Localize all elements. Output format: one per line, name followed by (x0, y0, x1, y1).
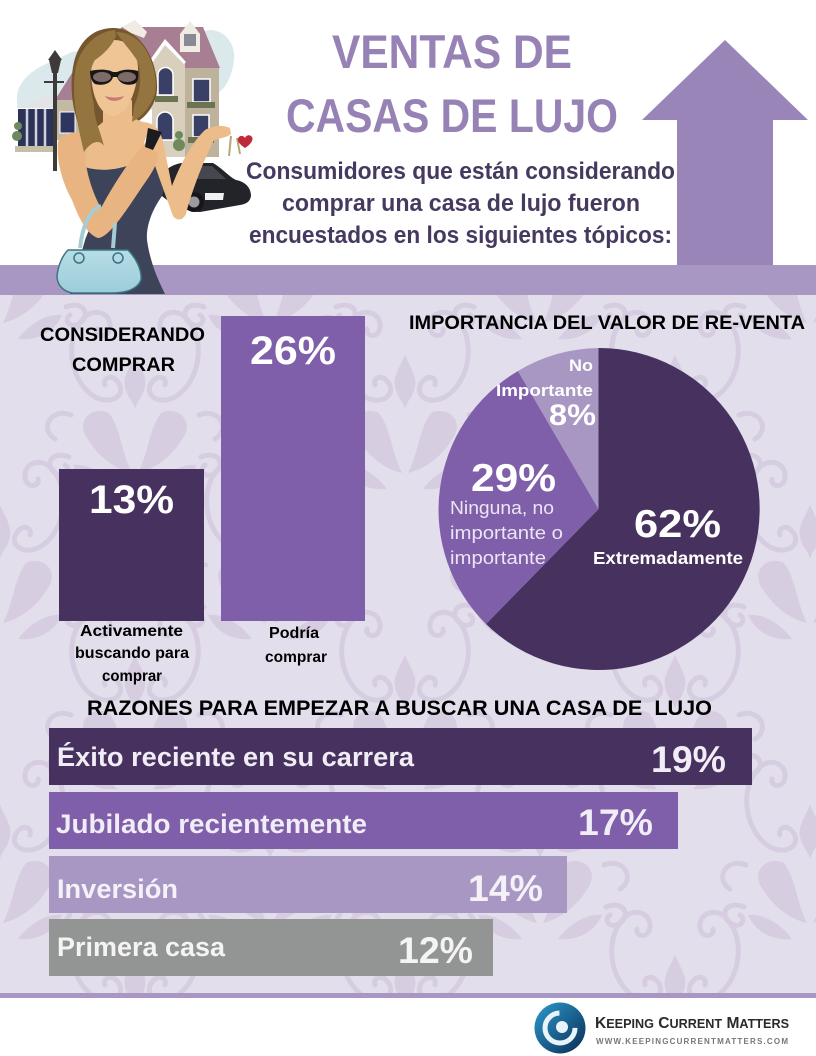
bar: éxito reciente 19% (49, 728, 752, 785)
bag (57, 250, 141, 293)
bar: podría comprar 26% (221, 316, 365, 621)
title (286, 25, 618, 142)
bar: primera casa 12%: Primera casa (57, 932, 226, 962)
title: VENTAS DE (332, 25, 572, 78)
slice: no importante 8% (518, 348, 598, 509)
left arm (58, 132, 158, 238)
bar: inversión 14%: 14% (468, 868, 543, 909)
face (91, 40, 138, 116)
neck and chest (84, 100, 150, 170)
icon: blue swirl (534, 1002, 586, 1054)
label: podría comprar: Podría (269, 625, 319, 642)
intro text: Consumidores que están considerando (246, 158, 675, 185)
label: no importante (496, 356, 596, 432)
bar: éxito reciente 19%: Éxito reciente en su carrera (57, 741, 415, 772)
illustration: black car (153, 163, 251, 212)
right arm (142, 122, 231, 220)
bar: primera casa 12%: 12% (398, 930, 473, 971)
heading: razones: RAZONES PARA EMPEZAR A BUSCAR UNA CASA DE LUJO (87, 696, 712, 720)
bar: activamente buscando 13% (59, 469, 204, 621)
icon: phone (145, 128, 162, 150)
label: ninguna: 29% (471, 457, 556, 500)
bar: jubilado 17% (49, 792, 678, 849)
bar: primera casa 12% (49, 919, 493, 976)
hair back (72, 28, 157, 158)
label: podría comprar (265, 625, 327, 666)
panel: considerando comprar bar chart (40, 316, 365, 685)
icon: heart keychain (238, 135, 253, 148)
label: activamente buscando: buscando para (75, 645, 189, 662)
bar: éxito reciente 19%: 19% (651, 739, 726, 780)
bar: activamente buscando 13%: 13% (89, 478, 174, 522)
hair front (74, 30, 156, 152)
label: no importante: Importante (496, 381, 593, 400)
bag handles (80, 206, 115, 248)
label: activamente buscando: comprar (102, 668, 162, 685)
dress (70, 158, 165, 294)
illustration: woman with keys and handbag (57, 28, 253, 294)
keys (229, 136, 240, 156)
wordmark: KEEPING CURRENT MATTERS (595, 1015, 789, 1032)
label: extremadamente: 62% (634, 503, 721, 546)
wordmark: WWW.KEEPINGCURRENTMATTERS.COM (596, 1037, 788, 1046)
icon: street lamp (44, 50, 64, 171)
panel: razones horizontal bars (49, 696, 752, 976)
sunglasses (90, 70, 138, 85)
slice: ninguna 29% (439, 371, 598, 624)
title: CASAS DE LUJO (286, 89, 618, 142)
icon: up arrow (642, 40, 808, 265)
mouth (105, 96, 124, 101)
heading: considerando comprar (40, 325, 205, 376)
illustration: house behind woman (12, 20, 234, 171)
label: podría comprar: comprar (265, 649, 327, 666)
label: ninguna: importante o (450, 522, 563, 543)
label: activamente buscando: Activamente (80, 623, 183, 640)
slice: extremadamente 62% (486, 348, 760, 670)
label: no importante: No (569, 356, 593, 375)
label: activamente buscando (75, 623, 189, 685)
label: ninguna (450, 457, 563, 568)
label: extremadamente (593, 503, 743, 568)
footer band (0, 993, 816, 998)
header band (0, 265, 816, 295)
bar: podría comprar 26%: 26% (250, 329, 336, 373)
heading: considerando comprar: CONSIDERANDO (40, 325, 205, 346)
intro text: comprar una casa de lujo fueron (282, 190, 640, 217)
intro text: encuestados en los siguientes tópicos: (249, 222, 672, 249)
label: ninguna: Ninguna, no (450, 497, 554, 518)
patterned background panel (0, 295, 816, 993)
heading: importancia: IMPORTANCIA DEL VALOR DE RE-VENTA (409, 312, 805, 334)
bar: jubilado 17%: 17% (578, 802, 653, 843)
label: extremadamente: Extremadamente (593, 548, 743, 568)
label: no importante: 8% (549, 399, 596, 432)
label: ninguna: importante (450, 547, 546, 568)
bar: inversión 14% (49, 856, 567, 913)
bar: jubilado 17%: Jubilado recientemente (56, 809, 367, 839)
bar: inversión 14%: Inversión (57, 874, 178, 904)
intro text (246, 158, 675, 249)
heading: considerando comprar: COMPRAR (72, 355, 175, 376)
logo: keeping current matters (534, 1002, 789, 1054)
wordmark (595, 1015, 789, 1046)
panel: importancia del valor de re-venta pie chart (409, 312, 805, 670)
